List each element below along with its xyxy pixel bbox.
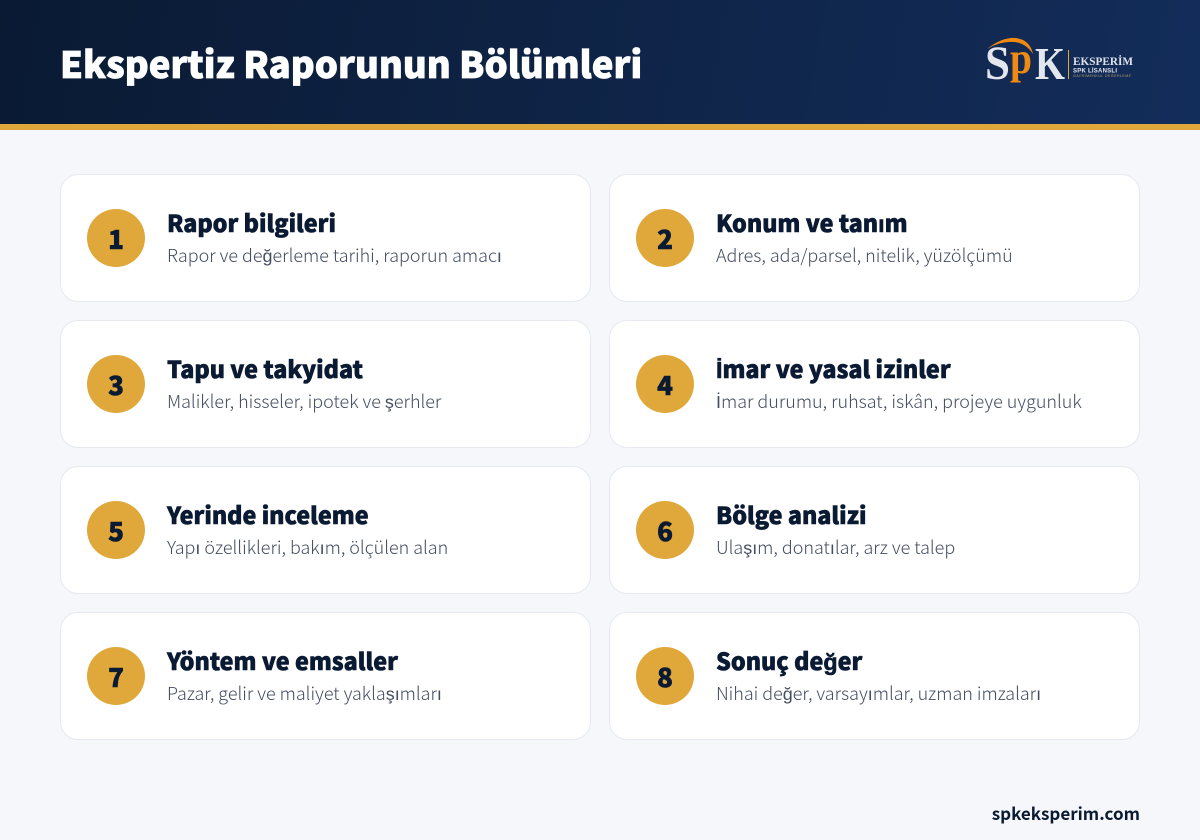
- card 8: Nihai değer, varsayımlar, uzman imzaları: [716, 680, 1041, 706]
- card 5: Yapı özellikleri, bakım, ölçülen alan: [167, 534, 448, 560]
- card 2: [609, 174, 1140, 302]
- card 2: Konum ve tanım: [716, 205, 908, 239]
- footer url: spkeksperim.com: [992, 800, 1140, 825]
- card 6: Ulaşım, donatılar, arz ve talep: [716, 534, 955, 560]
- card 4: [609, 320, 1140, 448]
- card 2: Adres, ada/parsel, nitelik, yüzölçümü: [716, 242, 1013, 268]
- card 7: Pazar, gelir ve maliyet yaklaşımları: [167, 680, 442, 706]
- card 3: Malikler, hisseler, ipotek ve şerhler: [167, 388, 441, 414]
- card 5: 5: [108, 512, 124, 549]
- card 8: [609, 612, 1140, 740]
- card 1: Rapor ve değerleme tarihi, raporun amacı: [167, 242, 502, 268]
- card 6: [609, 466, 1140, 594]
- card 1: 1: [108, 220, 124, 257]
- card 8: 8: [657, 658, 673, 695]
- card 2: 2: [657, 220, 673, 257]
- card 1: Rapor bilgileri: [167, 205, 336, 239]
- logo: SPK Eksperim: GAYRİMENKUL DEĞERLEME: [1073, 73, 1132, 78]
- card 3: [60, 320, 591, 448]
- card 5: Yerinde inceleme: [167, 497, 369, 531]
- card 4: İmar ve yasal izinler: [716, 351, 951, 385]
- logo: SPK Eksperim: p: [1010, 34, 1032, 83]
- card 7: 7: [108, 658, 124, 695]
- title: Ekspertiz Raporunun Bölümleri: [60, 36, 642, 89]
- card 3: 3: [108, 366, 124, 403]
- logo: SPK Eksperim: [985, 34, 1133, 86]
- logo: SPK Eksperim: SPK LİSANSLI: [1073, 68, 1117, 74]
- card 3: Tapu ve takyidat: [167, 351, 363, 385]
- card 7: [60, 612, 591, 740]
- card 1: [60, 174, 591, 302]
- card 4: İmar durumu, ruhsat, iskân, projeye uygunluk: [716, 388, 1082, 414]
- card 7: Yöntem ve emsaller: [167, 643, 398, 677]
- card 5: [60, 466, 591, 594]
- header banner: [0, 0, 1200, 130]
- card 6: Bölge analizi: [716, 497, 866, 531]
- logo: SPK Eksperim: EKSPERİM: [1073, 54, 1133, 68]
- card 4: 4: [657, 366, 673, 403]
- card 8: Sonuç değer: [716, 643, 862, 677]
- card 6: 6: [657, 512, 673, 549]
